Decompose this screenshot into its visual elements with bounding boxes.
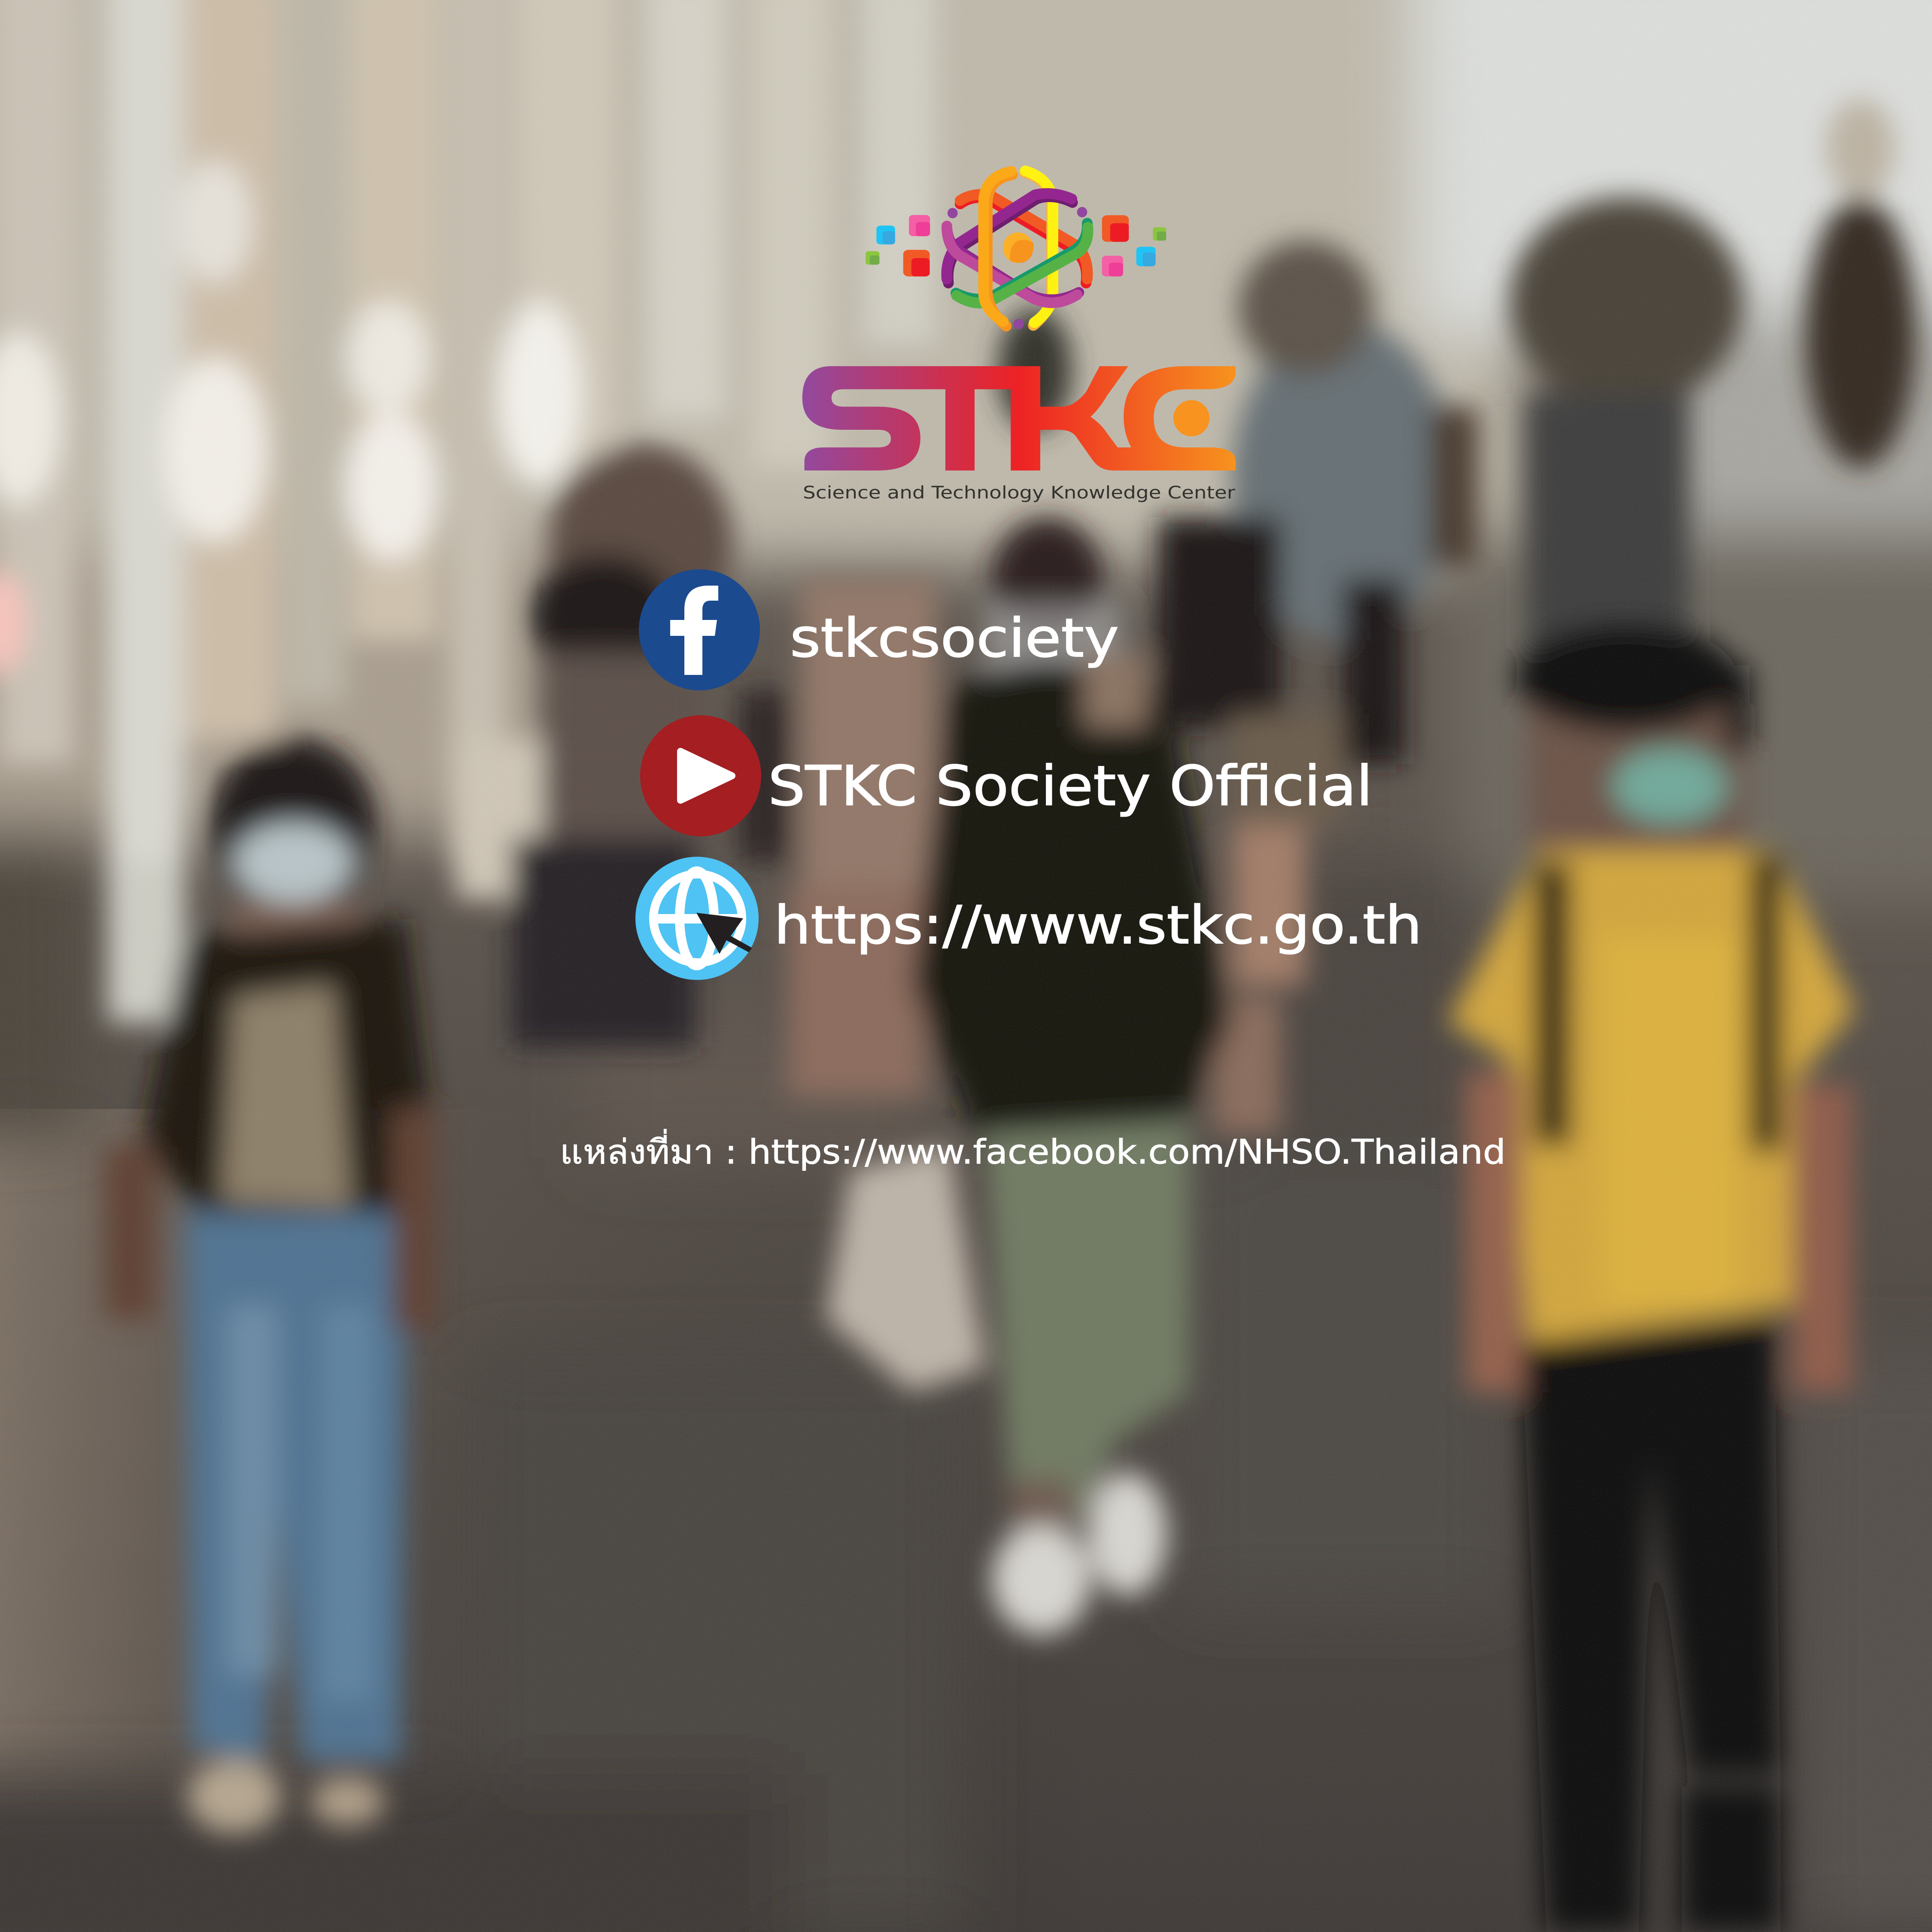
bright lamps (179, 160, 252, 283)
right person (1528, 690, 1744, 850)
wordmark STKC (802, 366, 1236, 471)
icon: website globe with cursor (635, 857, 759, 980)
magenta orbit (947, 226, 1079, 303)
centre person (992, 517, 1103, 641)
source line: แหล่งที่มา : https://www.facebook.com/NHSO.Thailand (560, 1129, 1506, 1172)
icon: youtube play (640, 715, 761, 836)
yellow orbit (1024, 171, 1053, 325)
purple orbit (947, 194, 1072, 283)
green orbit (956, 223, 1088, 303)
background crowd (1232, 320, 1454, 641)
website url: https://www.stkc.go.th (774, 895, 1422, 956)
icon: atom emblem (866, 171, 1166, 329)
purple dots (948, 207, 1087, 329)
icon: facebook (639, 569, 760, 690)
STKC logo (802, 171, 1236, 471)
orange orbit (984, 171, 1012, 326)
facebook handle: stkcsociety (790, 608, 1119, 669)
red orbit (960, 194, 1088, 283)
bag (826, 1146, 986, 1392)
left person (210, 737, 377, 914)
columns (109, 0, 185, 1023)
right pixel squares (1102, 215, 1166, 276)
nucleus (1003, 232, 1033, 263)
left pixel squares (866, 215, 930, 276)
far wall and ceiling (0, 0, 1528, 567)
logo tagline: Science and Technology Knowledge Center (803, 483, 1236, 503)
youtube channel name: STKC Society Official (768, 754, 1373, 818)
